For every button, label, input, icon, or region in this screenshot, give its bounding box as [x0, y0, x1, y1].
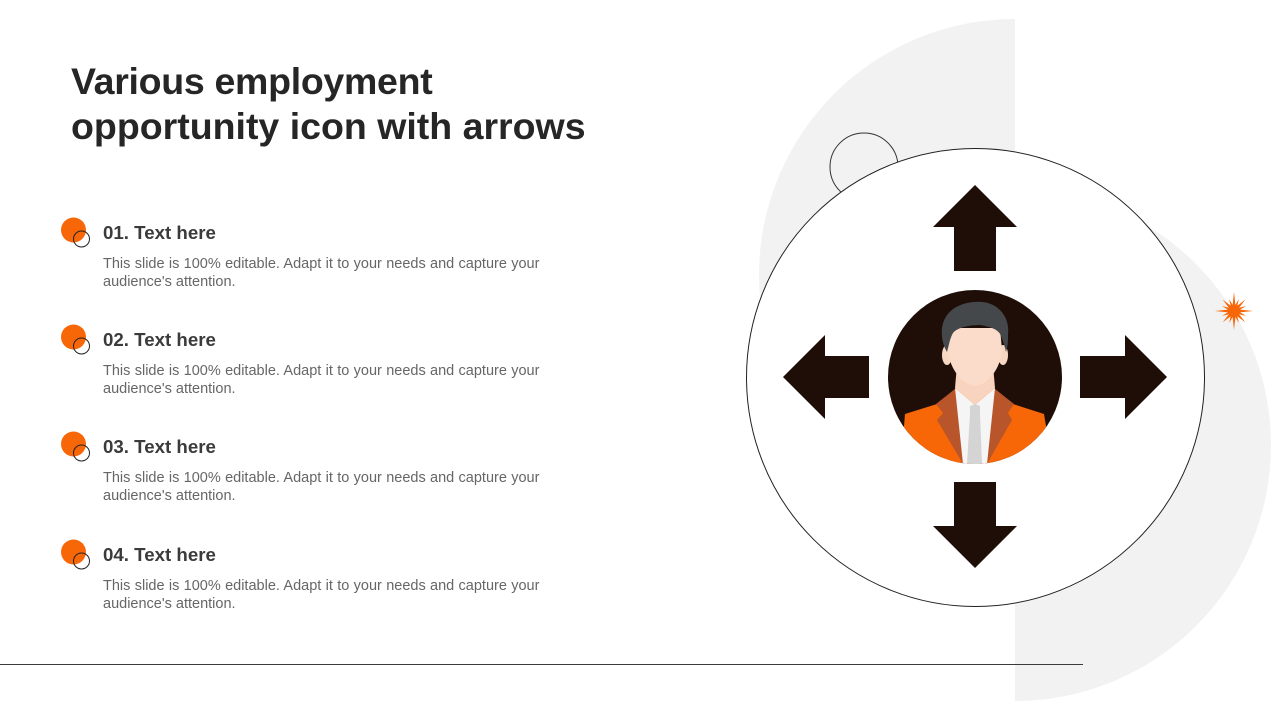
text 1: audience's attention.	[103, 274, 236, 290]
arrow down	[933, 482, 1017, 568]
background half circle bottom	[1015, 189, 1271, 701]
main circle	[746, 148, 1204, 606]
text 3: audience's attention.	[103, 488, 236, 504]
icon: businessman avatar	[888, 290, 1062, 470]
small outlined circle	[830, 133, 898, 201]
text 4: This slide is 100% editable. Adapt it to your needs and capture your	[103, 578, 539, 594]
shirt	[955, 388, 995, 464]
text 2	[103, 363, 540, 397]
icon: orange bullet 2	[61, 324, 90, 354]
icon: orange bullet 1	[61, 218, 90, 248]
face	[948, 328, 1002, 386]
icon: orange starburst	[1215, 292, 1253, 330]
arrow right	[1080, 335, 1167, 419]
icon: orange bullet 4	[61, 540, 90, 570]
title: Various employment	[71, 60, 432, 102]
hair	[942, 302, 1008, 352]
text 2: This slide is 100% editable. Adapt it to your needs and capture your	[103, 363, 539, 379]
title: opportunity icon with arrows	[71, 104, 586, 146]
list item 1	[61, 218, 540, 290]
list item 4	[61, 540, 540, 612]
ears	[942, 346, 950, 365]
text 4: audience's attention.	[103, 596, 236, 612]
text 1	[103, 256, 540, 290]
heading 4: 04. Text here	[103, 544, 216, 565]
text 3: This slide is 100% editable. Adapt it to your needs and capture your	[103, 470, 539, 486]
heading 1: 01. Text here	[103, 222, 216, 243]
tie	[967, 404, 982, 464]
jacket	[904, 389, 1046, 470]
background half circle top	[759, 19, 1015, 531]
neck	[955, 373, 995, 404]
icon: orange bullet 3	[61, 432, 90, 462]
text 3	[103, 470, 540, 504]
list item 2	[61, 324, 540, 397]
heading 3: 03. Text here	[103, 436, 216, 457]
text 4	[103, 578, 540, 612]
list item 3	[61, 432, 540, 504]
arrow left	[783, 335, 869, 419]
text 2: audience's attention.	[103, 381, 236, 397]
heading 2: 02. Text here	[103, 329, 216, 350]
lapels	[936, 389, 968, 464]
text 1: This slide is 100% editable. Adapt it to your needs and capture your	[103, 256, 539, 272]
arrow up	[933, 185, 1017, 271]
footer line	[0, 664, 1083, 666]
title	[71, 60, 586, 146]
